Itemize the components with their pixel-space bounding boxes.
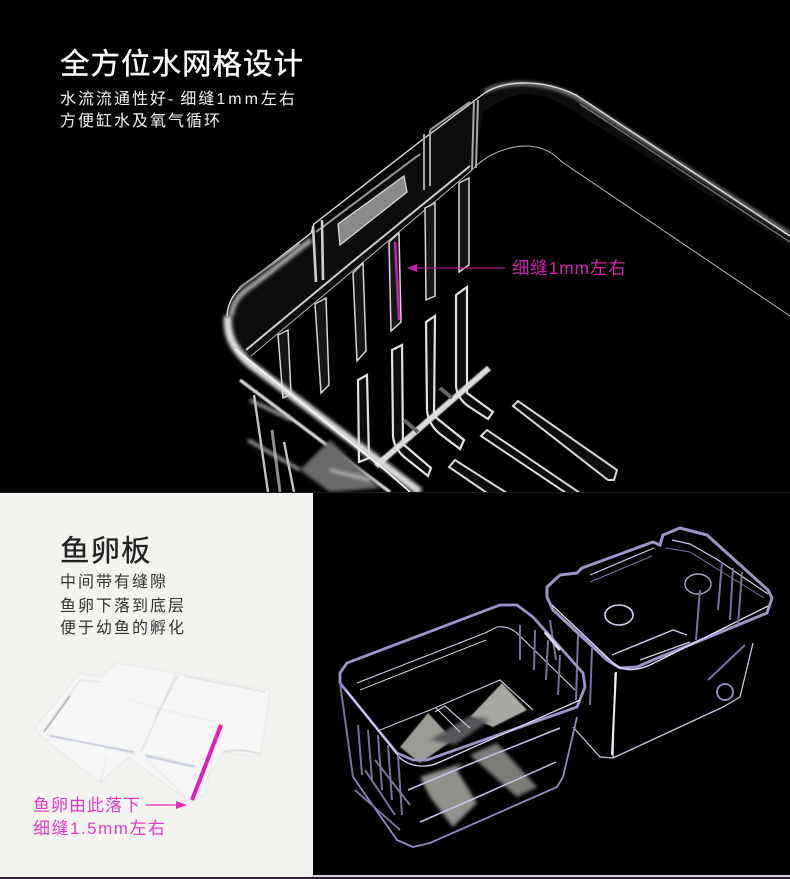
callout: slit width: 细缝1mm左右 <box>512 258 626 278</box>
callout: eggs drop here <box>33 796 166 838</box>
callout: eggs drop here: 细缝1.5mm左右 <box>33 819 166 838</box>
arrow: eggs drop pointer <box>146 801 187 809</box>
photo: open box (upper right) <box>547 528 772 758</box>
front rim <box>228 316 420 492</box>
text block: egg plate description: 中间带有缝隙 <box>60 573 168 591</box>
panel: top black background <box>0 0 790 492</box>
text block: water flow description <box>60 90 297 130</box>
text block: water flow description: 方便缸水及氧气循环 <box>60 111 222 130</box>
outer rim edge <box>227 83 790 316</box>
title: full-surround water grid: 全方位水网格设计 <box>60 48 304 81</box>
text block: egg plate description <box>60 573 186 637</box>
panel: bottom right black background <box>313 493 790 875</box>
highlighted slit <box>395 242 399 320</box>
egg plate pyramids <box>400 713 453 763</box>
arrow: slit pointer <box>407 264 505 272</box>
photo: transparent box corner with grid slits <box>227 83 790 495</box>
floor slots <box>449 401 617 495</box>
heading: egg plate: 鱼卵板 <box>60 535 152 568</box>
lower vertical slits and feet <box>358 287 493 476</box>
text block: water flow description: 水流流通性好- 细缝1mm左右 <box>60 90 297 108</box>
text block: egg plate description: 便于幼鱼的孵化 <box>60 619 186 637</box>
corner posts <box>424 100 478 190</box>
text block: egg plate description: 鱼卵下落到底层 <box>60 597 186 615</box>
holes <box>605 605 633 625</box>
floor ridge <box>376 368 489 466</box>
body <box>353 717 577 847</box>
highlighted slot <box>192 725 221 800</box>
photo: clear egg plate <box>35 663 270 802</box>
side slits <box>355 725 410 830</box>
photo: box with egg plate (lower left) <box>340 605 585 847</box>
inner rim <box>251 146 790 356</box>
outer rim <box>340 605 585 760</box>
panel: left light background <box>0 493 313 877</box>
body <box>573 643 753 758</box>
tab plate <box>338 176 407 245</box>
callout: eggs drop here: 鱼卵由此落下 <box>33 796 141 815</box>
bottom border <box>313 875 790 877</box>
rim <box>547 528 772 668</box>
outer rim glow <box>231 240 311 316</box>
upper vertical slits <box>278 178 469 398</box>
rim glass band <box>227 83 790 356</box>
